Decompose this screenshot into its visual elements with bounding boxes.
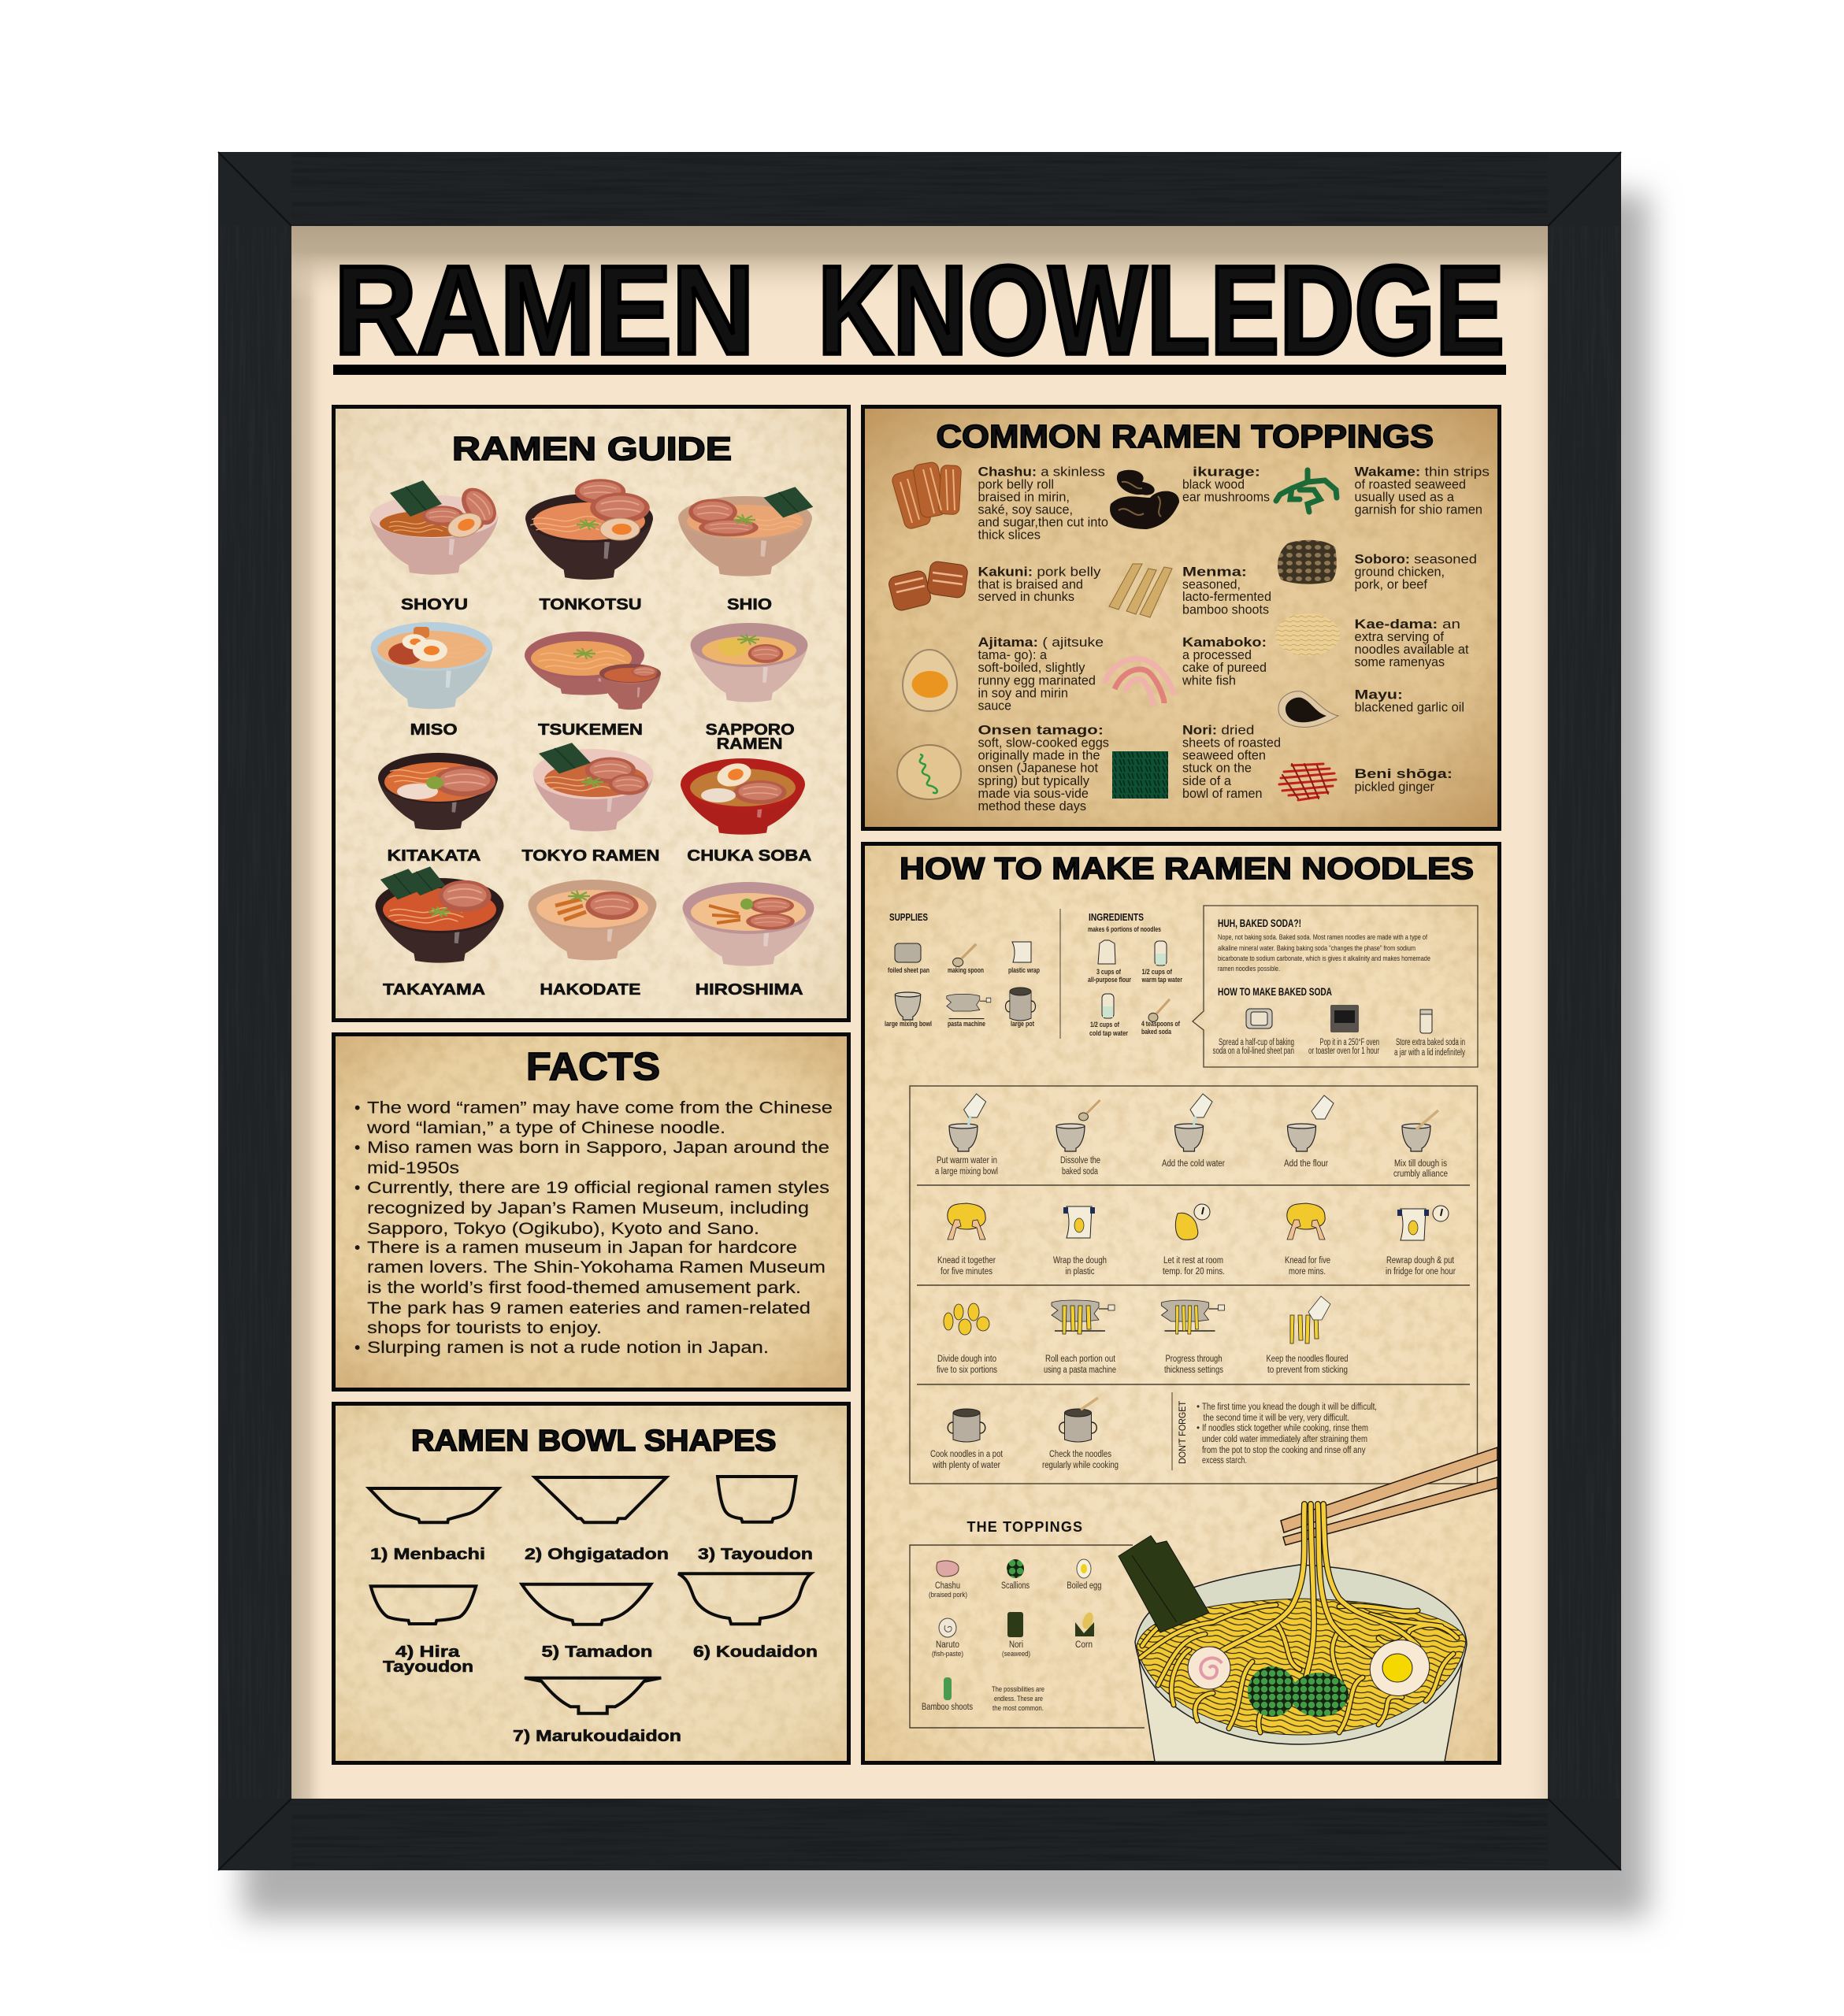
step captions row 2: in fridge for one hour — [1386, 1267, 1456, 1277]
callout: huh, baked soda: a jar with a lid indefinitely — [1394, 1048, 1465, 1058]
facts list: is the world’s first food-themed amusement park. — [367, 1279, 801, 1297]
don't forget note: If noodles stick together while cooking, rinse them — [1202, 1424, 1368, 1433]
title underline — [333, 365, 1506, 375]
step captions row 2: Rewrap dough & put — [1386, 1256, 1455, 1266]
step captions row 4: Cook noodles in a pot — [930, 1450, 1004, 1459]
text: beni shoga: Beni shōga: — [1355, 767, 1453, 781]
step captions row 3: Keep the noodles floured — [1267, 1354, 1349, 1364]
facts list: shops for tourists to enjoy. — [367, 1319, 602, 1337]
text: ajitama: in soy and mirin — [978, 686, 1068, 700]
the toppings box: (seaweed) — [1002, 1650, 1030, 1658]
text: kakuni: Kakuni: pork belly — [978, 565, 1101, 579]
chopsticks — [1281, 1447, 1497, 1545]
don't forget note: under cold water immediately after straining them — [1202, 1435, 1367, 1444]
don't forget note: from the pot to stop the cooking and rinse off any — [1202, 1446, 1366, 1455]
facts list: • — [354, 1099, 360, 1117]
ingredients list: 1/2 cups of — [1142, 968, 1173, 976]
supplies list: making spoon — [948, 966, 984, 975]
text: beni shoga — [1355, 767, 1453, 794]
title — [334, 239, 1505, 380]
icon: kae-dama — [1275, 613, 1340, 656]
label: HIROSHIMA — [696, 981, 803, 999]
text: chashu: saké, soy sauce, — [978, 502, 1073, 517]
text: kamaboko: a processed — [1182, 648, 1252, 662]
text: soboro: ground chicken, — [1355, 565, 1445, 579]
facts list: • — [354, 1239, 360, 1257]
step captions row 2: Knead for five — [1285, 1256, 1330, 1266]
step captions row 2: more mins. — [1289, 1267, 1326, 1277]
naruto — [1188, 1647, 1230, 1689]
bowl: chuka soba — [681, 758, 805, 835]
steps box — [910, 1086, 1478, 1484]
step captions row 3: thickness settings — [1164, 1366, 1223, 1375]
label: SHIO — [727, 596, 772, 613]
don't forget note: DON'T FORGET — [1177, 1400, 1188, 1464]
icon: beni shoga — [1279, 764, 1336, 800]
facts list: ramen lovers. The Shin-Yokohama Ramen Museum — [367, 1258, 826, 1277]
the toppings box — [910, 1519, 1145, 1728]
step icons row 2 — [948, 1203, 1449, 1240]
facts list: Miso ramen was born in Sapporo, Japan around the — [367, 1139, 829, 1157]
label: HAKODATE — [540, 981, 640, 999]
icon: kakuni — [887, 561, 969, 612]
text: ajitama — [978, 636, 1104, 713]
facts list: • — [354, 1139, 360, 1157]
don't forget note: The first time you knead the dough it will be difficult, — [1202, 1403, 1377, 1412]
text: kakuni — [978, 565, 1101, 604]
text: onsen tamago: Onsen tamago: — [978, 723, 1104, 737]
icon: menma — [1109, 564, 1172, 617]
scallions — [1248, 1666, 1349, 1717]
the toppings box: endless. These are — [994, 1695, 1043, 1703]
label: KITAKATA — [388, 847, 480, 865]
illustration: big ramen bowl with chopsticks — [1119, 1447, 1497, 1762]
text: kamaboko: white fish — [1182, 673, 1236, 687]
text: soboro: Soboro: seasoned — [1355, 552, 1477, 566]
text: menma: bamboo shoots — [1182, 602, 1269, 617]
panel: facts — [334, 1035, 849, 1389]
text: mayu: blackened garlic oil — [1355, 701, 1464, 715]
lifted noodles — [1205, 1504, 1418, 1701]
heading: how to make ramen noodles: HOW TO MAKE RAMEN NOODLES — [900, 852, 1474, 886]
text: nori: seaweed often — [1182, 749, 1266, 763]
callout: huh, baked soda — [1193, 906, 1478, 1067]
text: mayu — [1355, 688, 1464, 715]
text: ikurage: ear mushrooms — [1182, 490, 1270, 504]
the toppings box: Bamboo shoots — [922, 1703, 973, 1712]
step captions row 3: Divide dough into — [937, 1354, 996, 1364]
step captions row 2: Knead it together — [937, 1256, 996, 1266]
the toppings box: (fish-paste) — [932, 1650, 963, 1658]
icon: chashu — [891, 461, 962, 530]
the toppings box: Chashu — [935, 1581, 960, 1591]
callout: huh, baked soda: alkaline mineral water. Baking baking soda "changes the phase" from sodium — [1218, 944, 1415, 952]
text: menma — [1182, 565, 1271, 617]
text: nori: Nori: dried — [1182, 723, 1254, 737]
step icons row 4 — [948, 1398, 1098, 1442]
bowl rim — [1135, 1565, 1467, 1744]
label: RAMEN — [717, 736, 783, 753]
step captions row 1: Add the flour — [1284, 1159, 1328, 1169]
text: mayu: Mayu: — [1355, 688, 1403, 702]
label: MISO — [410, 721, 458, 739]
panel: how to make ramen noodles — [863, 844, 1500, 1762]
text: ikurage: black wood — [1182, 477, 1245, 491]
picture frame — [218, 152, 1621, 1870]
facts list: There is a ramen museum in Japan for hardcore — [367, 1239, 797, 1257]
bowl: hakodate — [528, 880, 657, 960]
text: nori: sheets of roasted — [1182, 736, 1281, 750]
the toppings box: Boiled egg — [1067, 1581, 1101, 1591]
icon: soboro — [1278, 540, 1337, 584]
facts list — [354, 1099, 833, 1357]
text: kae-dama — [1355, 617, 1469, 669]
step captions row 4: with plenty of water — [932, 1461, 1000, 1470]
label: 4) Hira — [395, 1644, 461, 1661]
label: 3) Tayoudon — [698, 1546, 813, 1563]
the toppings box: Scallions — [1001, 1581, 1030, 1591]
panel: ramen bowl shapes — [334, 1403, 849, 1762]
text: nori: stuck on the — [1182, 762, 1252, 776]
frame drop shadow — [243, 193, 1649, 1918]
the toppings box: Naruto — [936, 1640, 959, 1650]
text: chashu: Chashu: a skinless — [978, 465, 1105, 479]
step captions row 2: temp. for 20 mins. — [1163, 1267, 1225, 1277]
text: kakuni: that is braised and — [978, 578, 1083, 592]
ingredients list: INGREDIENTS — [1089, 911, 1144, 923]
step icons row 3 — [944, 1296, 1330, 1343]
step captions row 3: to prevent from sticking — [1267, 1366, 1348, 1375]
callout: huh, baked soda: Store extra baked soda in — [1396, 1038, 1465, 1047]
supplies list: SUPPLIES — [889, 911, 928, 923]
supplies list: foiled sheet pan — [888, 966, 929, 975]
label: SHOYU — [401, 596, 468, 613]
the toppings box: Nori — [1009, 1640, 1023, 1650]
step captions row 3 — [937, 1354, 1349, 1375]
text: ikurage: ikurage: — [1193, 465, 1260, 479]
step captions row 3: Roll each portion out — [1045, 1354, 1116, 1364]
bowl shape outlines — [369, 1477, 811, 1714]
facts list: • — [354, 1339, 360, 1357]
bowl body — [1137, 1644, 1466, 1762]
facts list: The park has 9 ramen eateries and ramen-related — [367, 1299, 811, 1317]
don't forget note: • — [1197, 1403, 1200, 1412]
text: onsen tamago: method these days — [978, 799, 1086, 813]
label: TSUKEMEN — [538, 721, 643, 739]
icon: kamaboko — [1104, 658, 1174, 706]
ingredients list: warm tap water — [1141, 976, 1182, 984]
text: soboro: pork, or beef — [1355, 578, 1427, 592]
text: wakame: of roasted seaweed — [1355, 477, 1466, 491]
text: chashu: and sugar,then cut into — [978, 516, 1108, 530]
the toppings box: Corn — [1075, 1640, 1093, 1650]
label: CHUKA SOBA — [687, 847, 811, 865]
text: wakame: usually used as a — [1355, 490, 1455, 504]
facts list: recognized by Japan’s Ramen Museum, including — [367, 1199, 809, 1217]
text: onsen tamago: onsen (Japanese hot — [978, 762, 1098, 776]
heading: facts: FACTS — [526, 1046, 660, 1088]
step captions row 2: Wrap the dough — [1053, 1256, 1107, 1266]
ingredients list: makes 6 portions of noodles — [1088, 925, 1161, 934]
text: onsen tamago: spring) but typically — [978, 774, 1090, 788]
icon: onsen tamago — [897, 745, 961, 799]
text: ajitama: sauce — [978, 699, 1011, 713]
text: soboro — [1355, 552, 1477, 592]
facts list: • — [354, 1179, 360, 1197]
text: nori: side of a — [1182, 774, 1232, 788]
text: ajitama: runny egg marinated — [978, 673, 1096, 687]
paper mat — [291, 226, 1548, 1799]
text: onsen tamago: made via sous-vide — [978, 787, 1089, 801]
text: onsen tamago: originally made in the — [978, 749, 1100, 763]
step captions row 1: Dissolve the — [1060, 1156, 1100, 1166]
don't forget note: • — [1197, 1424, 1200, 1433]
label: 2) Ohgigatadon — [525, 1546, 669, 1563]
bowl: tsukemen — [525, 632, 661, 710]
bowl: sapporo ramen — [690, 623, 808, 702]
heading: common ramen toppings: COMMON RAMEN TOPPINGS — [936, 418, 1434, 454]
step captions row 2: Let it rest at room — [1163, 1256, 1223, 1266]
text: menma: seasoned, — [1182, 578, 1241, 592]
label: TAKAYAMA — [383, 981, 485, 999]
supplies list: pasta machine — [948, 1020, 985, 1028]
step captions row 2: for five minutes — [941, 1267, 992, 1277]
noodles — [1137, 1599, 1466, 1735]
ingredients list: baked soda — [1141, 1028, 1172, 1036]
text: kamaboko: cake of pureed — [1182, 661, 1267, 675]
step captions row 4: regularly while cooking — [1042, 1461, 1119, 1470]
the toppings box: the most common. — [992, 1704, 1044, 1713]
don't forget note: the second time it will be very, very difficult. — [1204, 1414, 1349, 1423]
label: 6) Koudaidon — [693, 1644, 818, 1661]
ingredients list: 1/2 cups of — [1090, 1021, 1120, 1029]
label — [706, 721, 795, 753]
step captions row 2: in plastic — [1065, 1267, 1095, 1277]
callout: huh, baked soda: soda on a foil-lined sheet pan — [1213, 1047, 1294, 1056]
bowl: tonkotsu — [525, 479, 653, 580]
text: kae-dama: noodles available at — [1355, 643, 1469, 657]
text: nori: bowl of ramen — [1182, 787, 1262, 801]
step captions row 4: Check the noodles — [1049, 1450, 1111, 1459]
ingredients list: 4 teaspoons of — [1141, 1020, 1181, 1028]
step icons row 1 — [949, 1094, 1438, 1151]
icon: ikurage — [1110, 470, 1179, 529]
callout: huh, baked soda: HUH, BAKED SODA?! — [1218, 917, 1301, 929]
text: onsen tamago — [978, 723, 1109, 813]
title: KNOWLEDGE — [818, 239, 1505, 380]
title: RAMEN — [334, 239, 755, 380]
label: 7) Marukoudaidon — [513, 1728, 681, 1745]
step captions row 1: baked soda — [1062, 1167, 1098, 1177]
facts list: Slurping ramen is not a rude notion in Japan. — [367, 1339, 769, 1357]
don't forget note — [1172, 1392, 1377, 1470]
callout: huh, baked soda: Spread a half-cup of baking — [1219, 1038, 1294, 1047]
callout: huh, baked soda: bicarbonate to sodium carbonate, which is gives it alkalinity and makes homemade — [1218, 954, 1430, 962]
callout: huh, baked soda: or toaster oven for 1 hour — [1308, 1047, 1379, 1056]
label: TOKYO RAMEN — [521, 847, 659, 865]
text: chashu — [978, 465, 1108, 543]
text: kae-dama: some ramenyas — [1355, 655, 1445, 669]
text: menma: lacto-fermented — [1182, 590, 1271, 604]
step captions row 3: using a pasta machine — [1044, 1366, 1116, 1375]
text: kae-dama: Kae-dama: an — [1355, 617, 1460, 632]
icon: nori — [1112, 751, 1168, 799]
text: chashu: pork belly roll — [978, 477, 1054, 491]
callout: huh, baked soda: Nope, not baking soda. Baked soda. Most ramen noodles are made with a type of — [1218, 933, 1427, 941]
facts list: word “lamian,” a type of Chinese noodle. — [366, 1119, 725, 1137]
text: ikurage — [1182, 465, 1270, 504]
ingredients list: 3 cups of — [1096, 968, 1122, 976]
bowl: miso — [370, 622, 493, 709]
panel: ramen guide — [334, 406, 849, 1021]
supplies list: plastic wrap — [1008, 966, 1040, 975]
ingredients list: cold tap water — [1089, 1029, 1128, 1038]
the toppings box: THE TOPPINGS — [967, 1519, 1082, 1535]
bowl: kitakata — [378, 753, 498, 830]
text: chashu: thick slices — [978, 528, 1041, 543]
step captions row 1: Mix till dough is — [1394, 1159, 1447, 1169]
text: kamaboko — [1182, 636, 1267, 687]
text: ajitama: Ajitama: ( ajitsuke — [978, 636, 1104, 650]
panel: common ramen toppings — [863, 406, 1500, 828]
text: nori — [1182, 723, 1281, 801]
text: chashu: braised in mirin, — [978, 490, 1070, 504]
text: wakame — [1355, 465, 1490, 517]
facts list: Currently, there are 19 official regional ramen styles — [367, 1179, 829, 1197]
the toppings box: (braised pork) — [929, 1591, 967, 1599]
text: kamaboko: Kamaboko: — [1182, 636, 1267, 650]
callout: huh, baked soda: Pop it in a 250°F oven — [1320, 1038, 1379, 1047]
ingredients list — [1088, 911, 1182, 1038]
icon: mayu garlic oil — [1278, 691, 1338, 727]
step captions row 1: a large mixing bowl — [935, 1167, 998, 1177]
facts list: mid-1950s — [367, 1159, 459, 1177]
heading: ramen bowl shapes: RAMEN BOWL SHAPES — [411, 1425, 777, 1458]
label — [383, 1644, 473, 1676]
step captions row 1: crumbly alliance — [1393, 1169, 1448, 1179]
supplies list — [885, 911, 1040, 1028]
step captions row 1 — [935, 1156, 1448, 1179]
heading: ramen guide: RAMEN GUIDE — [452, 430, 732, 467]
callout: huh, baked soda: ramen noodles possible. — [1218, 965, 1280, 973]
facts list: Sapporo, Tokyo (Ogikubo), Kyoto and Sano. — [367, 1220, 759, 1238]
label: 1) Menbachi — [370, 1546, 485, 1563]
bowl: shio — [678, 487, 813, 576]
text: ajitama: soft-boiled, slightly — [978, 661, 1085, 675]
nori sheet — [1119, 1536, 1209, 1632]
text: kakuni: served in chunks — [978, 590, 1074, 604]
don't forget note: excess starch. — [1202, 1456, 1247, 1466]
label: 5) Tamadon — [542, 1644, 652, 1661]
the toppings box: The possibilities are — [992, 1685, 1044, 1694]
text: onsen tamago: soft, slow-cooked eggs — [978, 736, 1109, 750]
bowl: hiroshima — [682, 882, 814, 966]
text: ajitama: tama- go): a — [978, 648, 1048, 662]
step captions row 3: Progress through — [1166, 1354, 1223, 1364]
supplies list: large mixing bowl — [885, 1020, 932, 1028]
text: wakame: Wakame: thin strips — [1355, 465, 1490, 479]
boiled egg — [1362, 1632, 1438, 1704]
text: menma: Menma: — [1182, 565, 1247, 579]
step captions row 1: Put warm water in — [937, 1156, 997, 1166]
bowl: shoyu — [370, 480, 503, 575]
bowl: takayama — [375, 866, 504, 963]
supplies list: large pot — [1011, 1020, 1035, 1028]
label: SAPPORO — [706, 721, 795, 739]
icon: wakame — [1276, 470, 1337, 512]
icon: ajitama egg — [903, 650, 957, 711]
text: beni shoga: pickled ginger — [1355, 780, 1435, 794]
ingredients list: all-purpose flour — [1088, 976, 1131, 984]
label: Tayoudon — [383, 1658, 473, 1676]
step captions row 2 — [937, 1256, 1456, 1277]
label: TONKOTSU — [539, 596, 641, 613]
text: kae-dama: extra serving of — [1355, 630, 1444, 644]
step captions row 4 — [930, 1450, 1119, 1470]
step captions row 1: Add the cold water — [1162, 1159, 1225, 1169]
callout: huh, baked soda: HOW TO MAKE BAKED SODA — [1218, 985, 1332, 998]
text: wakame: garnish for shio ramen — [1355, 502, 1482, 517]
bowl: tokyo ramen — [532, 743, 654, 832]
noodle strands — [1141, 1605, 1457, 1732]
facts list: The word “ramen” may have come from the Chinese — [367, 1099, 833, 1117]
step captions row 3: five to six portions — [937, 1366, 997, 1375]
